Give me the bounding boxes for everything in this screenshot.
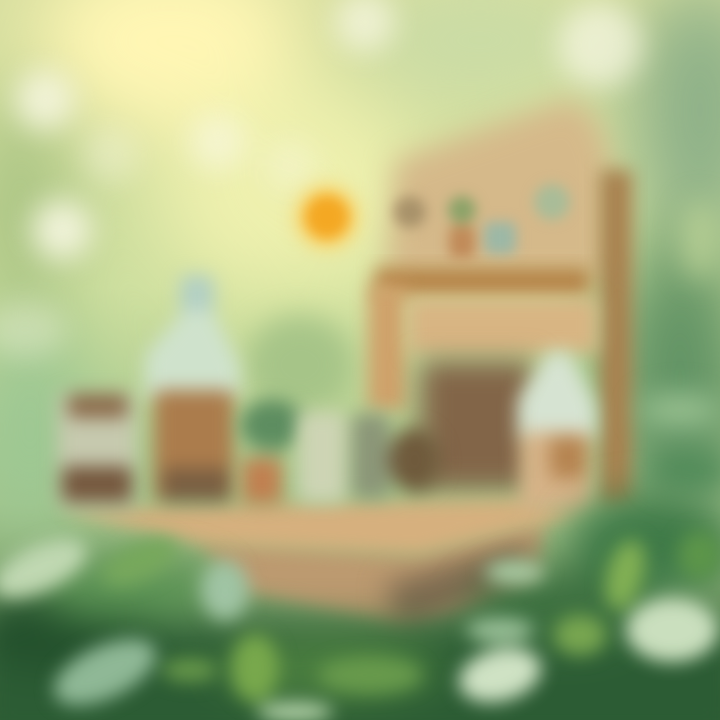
fern behind bottles xyxy=(245,315,355,415)
plant in terracotta pot xyxy=(240,399,304,504)
shelf dark cavity xyxy=(420,360,535,490)
leaves xyxy=(0,527,720,720)
small pots on shelf xyxy=(394,184,570,258)
icon: orange sun xyxy=(295,185,359,249)
foreground leaves xyxy=(0,200,720,720)
tabletop and wooden base xyxy=(60,498,580,628)
shelf lower panel xyxy=(408,298,598,353)
base front xyxy=(200,520,545,625)
shelf back panel xyxy=(385,100,610,280)
tabletop xyxy=(60,498,580,556)
right side foliage xyxy=(640,200,720,490)
foliage base xyxy=(0,495,720,720)
shelf side post xyxy=(600,170,632,505)
small glass jars xyxy=(298,412,441,502)
bottle: large centre-left xyxy=(145,275,240,502)
shelf left post xyxy=(368,285,406,410)
base shadow xyxy=(385,540,530,628)
bokeh light spots xyxy=(0,0,642,358)
wooden shelf unit xyxy=(368,100,632,505)
shelf top board xyxy=(375,268,590,296)
bottle: right xyxy=(518,352,596,510)
jar: left xyxy=(58,392,136,508)
